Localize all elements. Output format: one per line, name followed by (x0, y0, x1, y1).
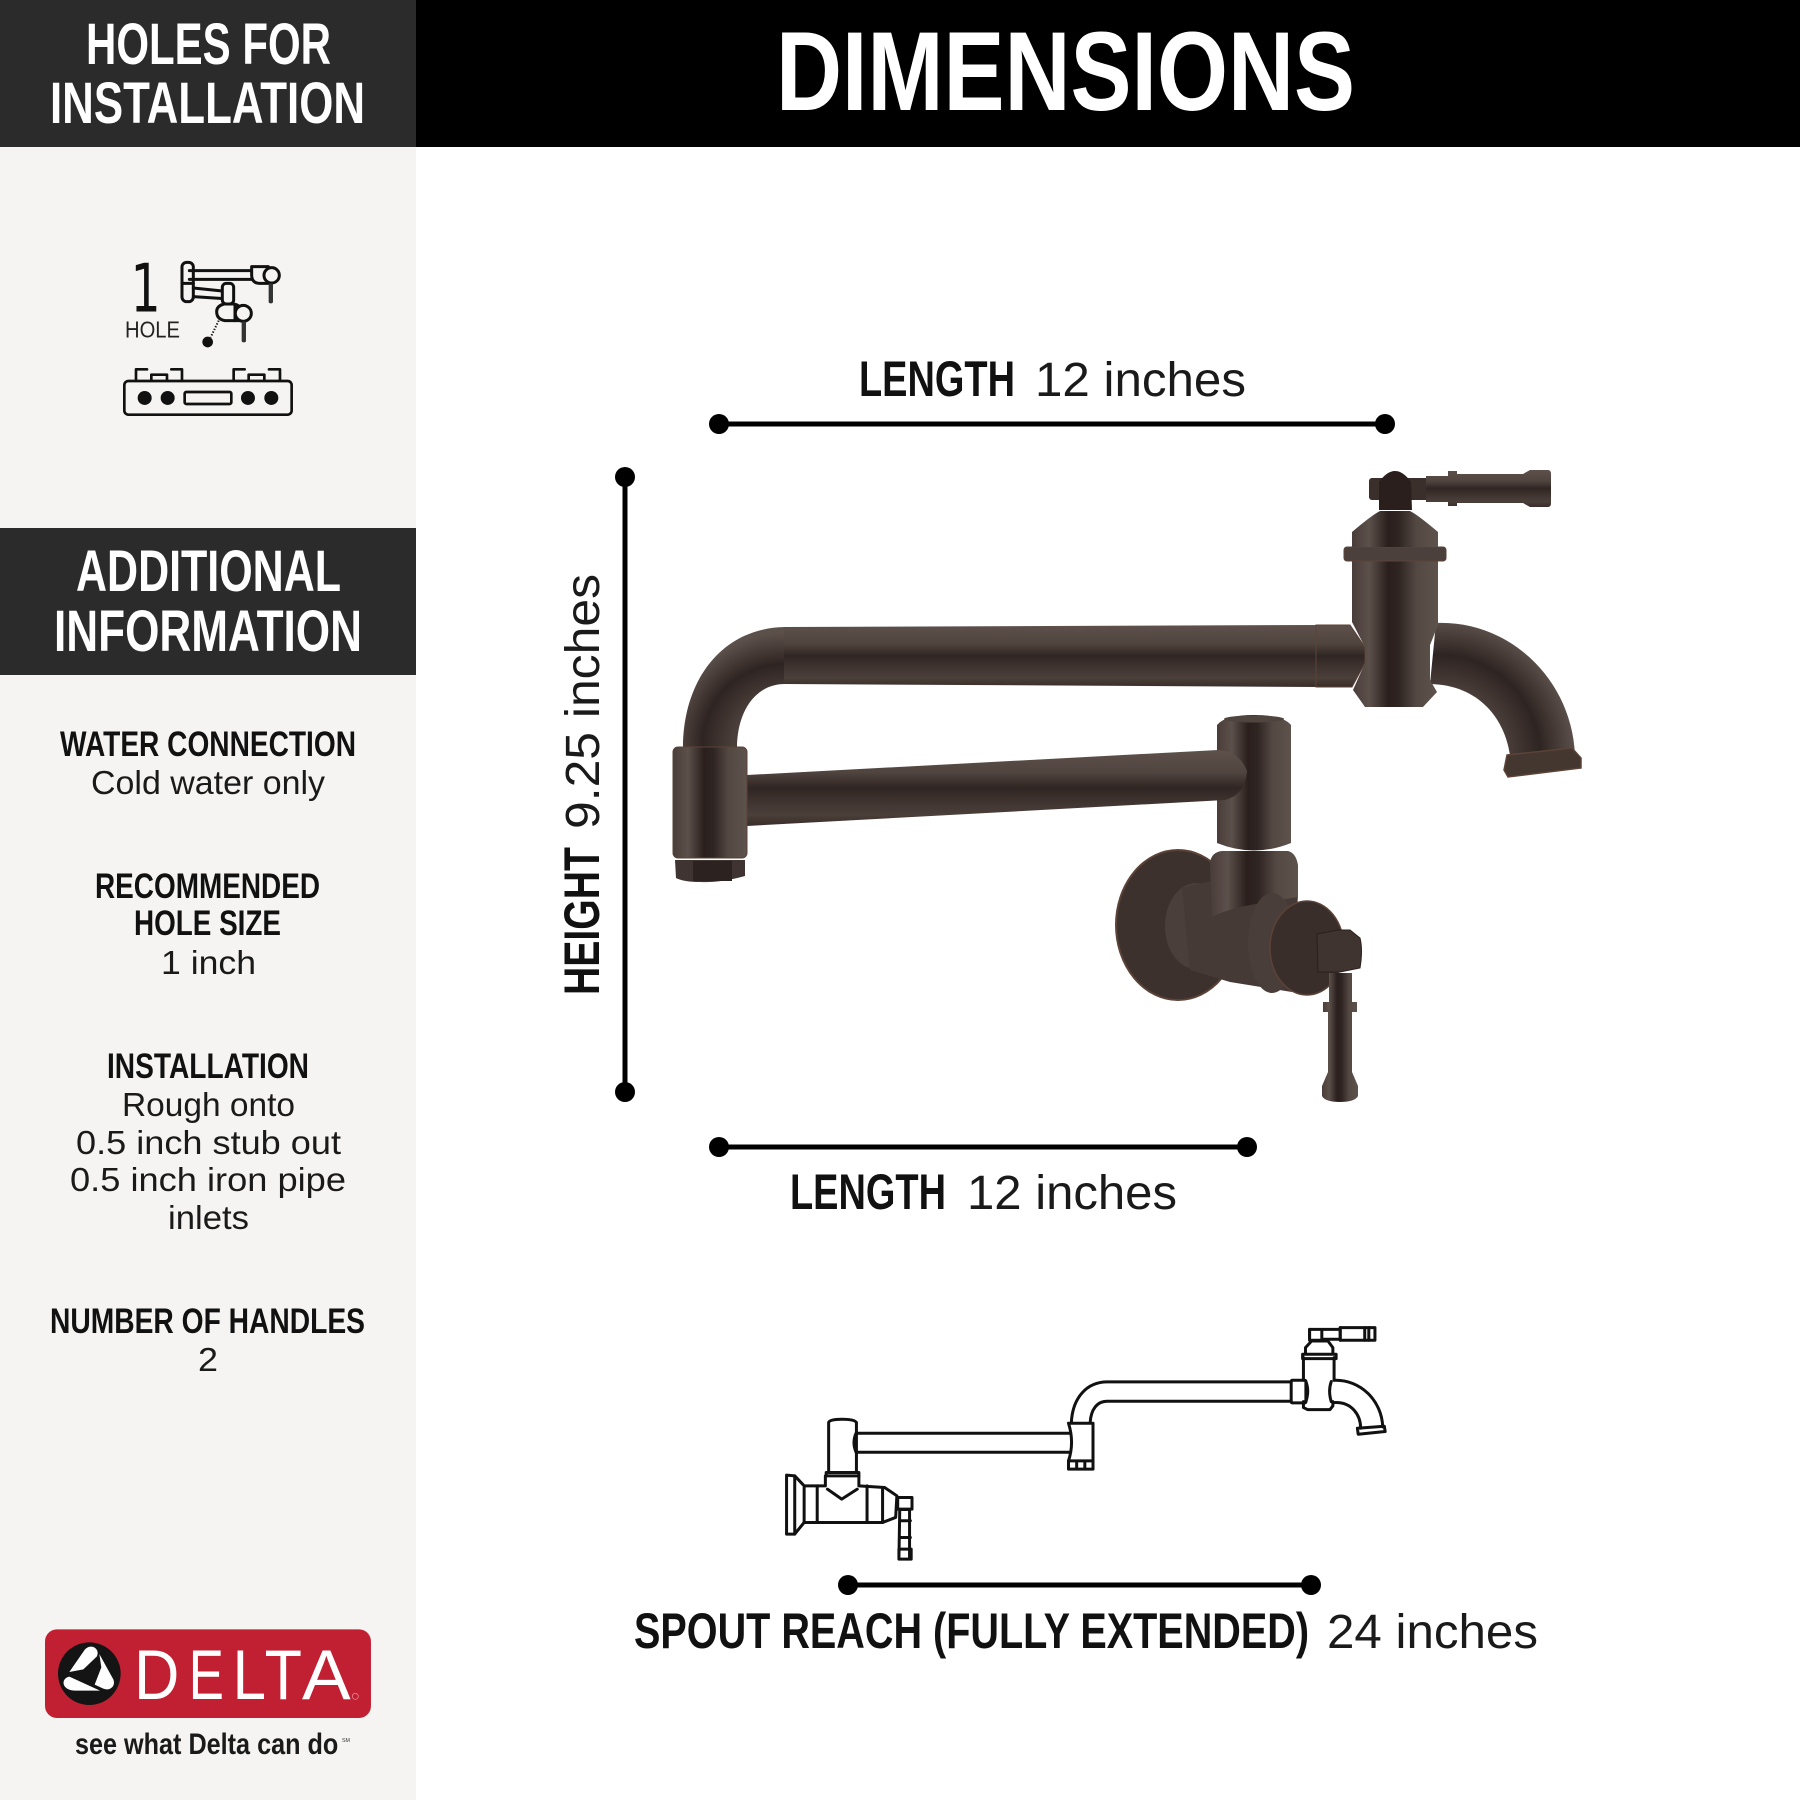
T collar (1316, 625, 1365, 687)
dimension: lower length: LENGTH (790, 1164, 946, 1220)
heading: additional information: INFORMATION (54, 599, 362, 664)
lower swing arm (747, 750, 1247, 826)
text block: installation: Rough onto (122, 1086, 295, 1123)
panel: sidebar (0, 0, 416, 1800)
dimension: spout reach (634, 1575, 1538, 1659)
escutcheon cylinder (1165, 883, 1227, 969)
upper swing arm (683, 625, 1320, 748)
heading: holes for installation (0, 0, 416, 147)
dimension: spout reach: SPOUT REACH (FULLY EXTENDED) (634, 1603, 1309, 1659)
icon: 1 hole pot filler over cooktop: HOLE (125, 317, 180, 343)
logo: Delta: see what Delta can do (75, 1728, 338, 1761)
heading: holes for installation: HOLES FOR (86, 12, 331, 77)
logo: Delta: A (302, 1635, 351, 1714)
dimension: lower length: 12 inches (967, 1167, 1177, 1220)
dimension: height: 9.25 inches (557, 574, 610, 829)
elbow collar (673, 747, 747, 858)
valve knob (1270, 901, 1344, 995)
ring (1344, 547, 1446, 561)
text block: recommended hole size: 1 inch (161, 944, 256, 981)
icon: 1 hole pot filler over cooktop: 1 (131, 250, 161, 328)
hex nut (675, 860, 745, 882)
spout outlet (1504, 748, 1581, 777)
text block: number of handles: 2 (198, 1341, 218, 1378)
lower handle lever (1322, 973, 1358, 1102)
text block: installation: 0.5 inch stub out (76, 1124, 341, 1161)
title banner: dimensions (416, 0, 1800, 147)
product: pot filler faucet (673, 470, 1581, 1102)
title banner: dimensions: DIMENSIONS (776, 9, 1355, 134)
dimension: top length (709, 351, 1395, 434)
top handle lever (1426, 470, 1551, 507)
logo: Delta: SM (342, 1738, 350, 1744)
lower valve body (1182, 880, 1298, 992)
top handle hub (1379, 471, 1412, 510)
dimension: top length: LENGTH (859, 351, 1015, 407)
text block: installation: inlets (168, 1199, 249, 1236)
valve neck (1210, 851, 1298, 917)
valve collar (1248, 893, 1296, 993)
line drawing: faucet fully extended (787, 1328, 1385, 1559)
lower swing arm post (1217, 715, 1291, 850)
wall plate (1116, 850, 1240, 1000)
heading: additional information: ADDITIONAL (76, 539, 341, 604)
text block: installation: INSTALLATION (107, 1047, 309, 1086)
dimension: top length: 12 inches (1035, 354, 1246, 407)
post cap (1224, 716, 1284, 722)
logo: Delta: E (189, 1635, 224, 1714)
valve body (1352, 561, 1438, 707)
dimension: lower length (709, 1137, 1257, 1220)
top handle stem (1369, 478, 1429, 500)
logo: Delta: T (265, 1635, 302, 1714)
lower handle hub (1317, 930, 1362, 972)
text block: number of handles: NUMBER OF HANDLES (50, 1302, 365, 1341)
text block: recommended hole size (95, 867, 320, 981)
heading: holes for installation: INSTALLATION (50, 71, 365, 136)
dimension: spout reach: 24 inches (1327, 1606, 1538, 1659)
logo: Delta: L (233, 1635, 266, 1714)
text block: water connection: Cold water only (91, 764, 325, 801)
spout (1430, 623, 1575, 755)
text block: number of handles (50, 1302, 365, 1378)
logo: Delta (45, 1629, 371, 1761)
text block: recommended hole size: RECOMMENDED (95, 867, 320, 906)
heading: additional information (0, 528, 416, 675)
dimension: height: HEIGHT (554, 847, 610, 995)
text block: installation (70, 1047, 346, 1236)
logo: Delta: D (134, 1635, 179, 1714)
dimension: height (554, 467, 635, 1102)
text block: water connection (60, 725, 356, 801)
dome (1352, 511, 1438, 547)
text block: recommended hole size: HOLE SIZE (134, 904, 281, 943)
text block: water connection: WATER CONNECTION (60, 725, 356, 764)
icon: 1 hole pot filler over cooktop (124, 250, 292, 415)
text block: installation: 0.5 inch iron pipe (70, 1161, 346, 1198)
